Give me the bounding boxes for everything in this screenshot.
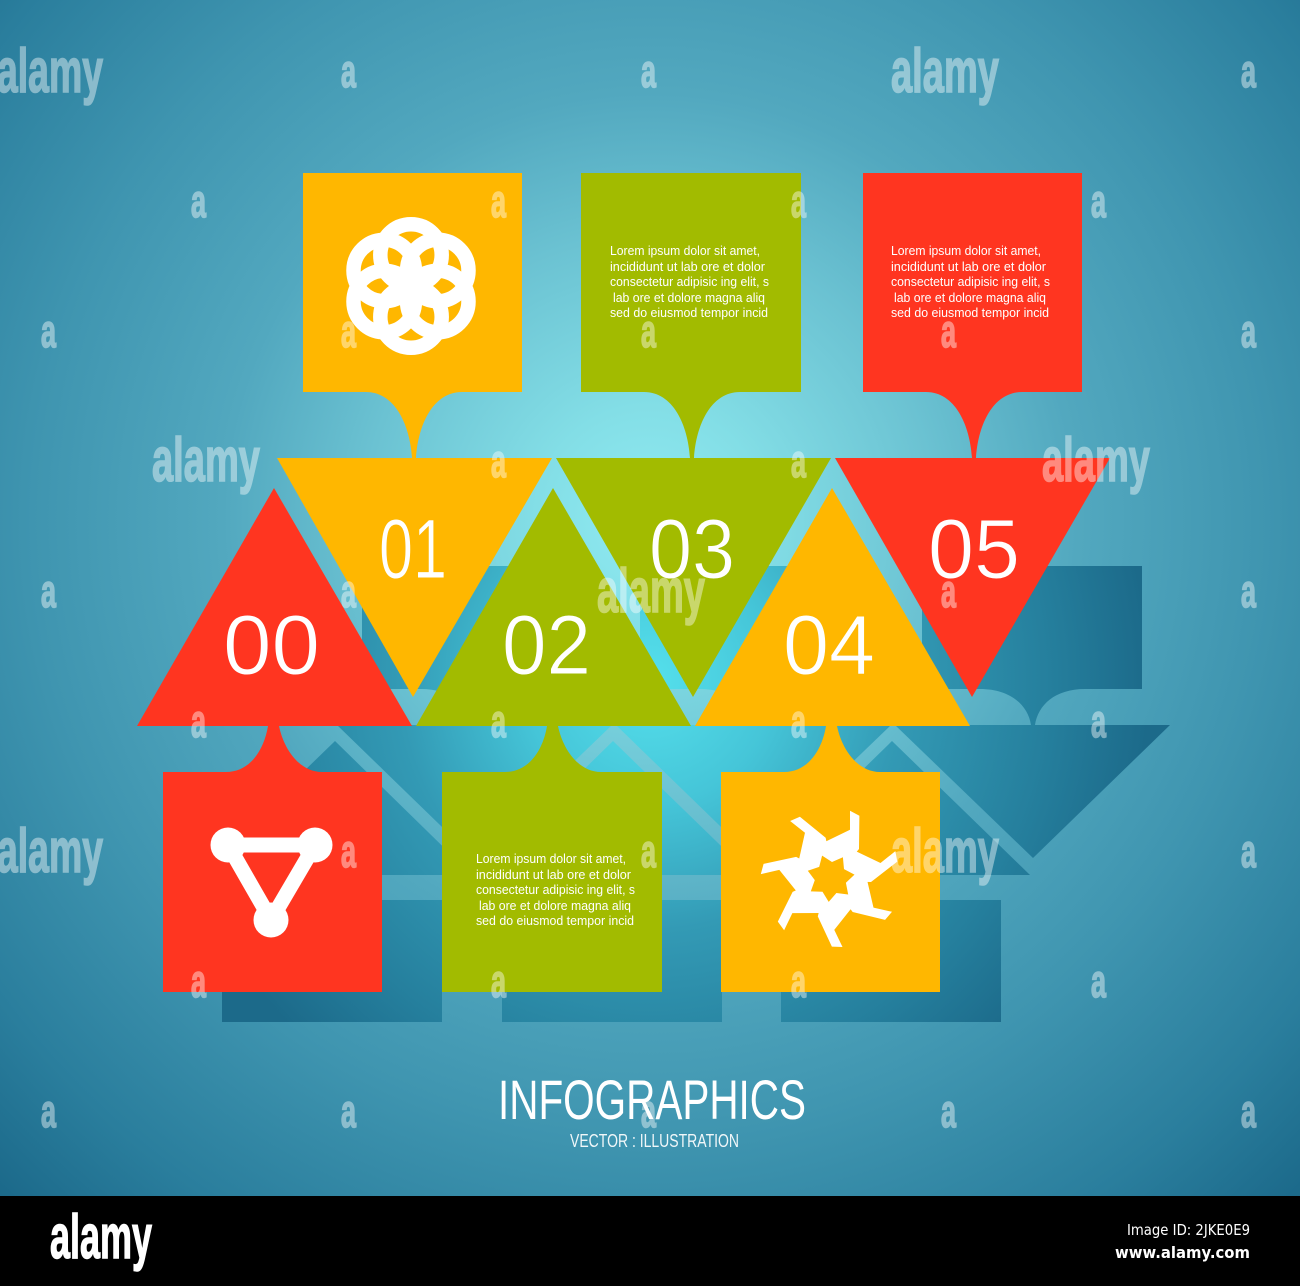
subtitle: VECTOR : ILLUSTRATION [570, 1131, 739, 1151]
watermarks: a [191, 955, 206, 1007]
text block: incididunt ut lab ore et dolor [610, 260, 765, 274]
text block [891, 244, 1050, 320]
watermarks: a [1241, 305, 1256, 357]
watermarks: a [1241, 565, 1256, 617]
footer bar [0, 1196, 1300, 1286]
text block: sed do eiusmod tempor incid [610, 306, 768, 320]
watermarks: a [1241, 45, 1256, 97]
pin: yellow top with rosette icon [303, 173, 522, 458]
pin: red top with text [863, 173, 1082, 458]
footer logo: alamy [50, 1203, 152, 1272]
watermarks: a [1091, 695, 1106, 747]
watermarks: a [941, 305, 956, 357]
text block: lab ore et dolore magna aliq [894, 291, 1046, 305]
text block: incididunt ut lab ore et dolor [476, 868, 631, 882]
watermarks: a [491, 695, 506, 747]
watermarks: a [491, 175, 506, 227]
icon: seven blade star [759, 811, 901, 951]
triangle 05: 05 [928, 502, 1020, 596]
image id: Image ID: 2JKE0E9 [1127, 1221, 1250, 1239]
triangle 00 [137, 488, 412, 726]
watermarks: a [341, 1085, 356, 1137]
watermarks: alamy [0, 37, 103, 106]
watermarks: a [191, 695, 206, 747]
text block: consectetur adipisic ing elit, s [610, 275, 769, 289]
text block: consectetur adipisic ing elit, s [476, 883, 635, 897]
watermarks: a [1241, 825, 1256, 877]
watermarks: a [41, 1085, 56, 1137]
watermarks: a [1091, 175, 1106, 227]
watermarks: a [491, 435, 506, 487]
pin: red bottom with triangle icon [163, 726, 382, 992]
triangle 02 [416, 488, 691, 726]
icon: connected triangle [210, 828, 332, 938]
website: www.alamy.com [1115, 1243, 1250, 1262]
watermarks: a [1241, 1085, 1256, 1137]
watermarks: a [791, 695, 806, 747]
watermarks: a [941, 1085, 956, 1137]
watermarks: alamy [152, 426, 260, 495]
watermarks: a [191, 175, 206, 227]
triangle 01: 01 [379, 502, 447, 596]
watermarks: alamy [891, 37, 999, 106]
watermarks: a [341, 825, 356, 877]
triangle 03 [556, 458, 831, 697]
watermarks: a [641, 825, 656, 877]
pin: green bottom with text [442, 726, 662, 992]
watermarks: alamy [597, 557, 705, 626]
pin: yellow bottom with star icon [721, 726, 940, 992]
title: INFOGRAPHICS [498, 1068, 806, 1131]
text block: lab ore et dolore magna aliq [613, 291, 765, 305]
triangle 01 [277, 458, 552, 697]
watermarks: a [41, 565, 56, 617]
text block: consectetur adipisic ing elit, s [891, 275, 1050, 289]
text block: Lorem ipsum dolor sit amet, [476, 852, 626, 866]
watermarks: a [791, 175, 806, 227]
text block: incididunt ut lab ore et dolor [891, 260, 1046, 274]
watermarks: a [641, 45, 656, 97]
text block [610, 244, 769, 320]
text block [476, 852, 635, 928]
watermarks: a [341, 45, 356, 97]
watermarks: alamy [0, 817, 103, 886]
watermarks: a [41, 305, 56, 357]
triangle 03: 03 [649, 502, 735, 596]
shadow shapes [197, 566, 1170, 1022]
watermarks: a [641, 1085, 656, 1137]
watermarks: alamy [891, 817, 999, 886]
watermarks: a [791, 435, 806, 487]
watermarks: a [791, 955, 806, 1007]
watermarks: a [341, 565, 356, 617]
triangle 05 [835, 458, 1110, 697]
triangle 04 [695, 488, 970, 726]
text block: sed do eiusmod tempor incid [891, 306, 1049, 320]
watermarks: a [1091, 955, 1106, 1007]
text block: sed do eiusmod tempor incid [476, 914, 634, 928]
triangle 00: 00 [223, 598, 320, 692]
text block: Lorem ipsum dolor sit amet, [891, 244, 1041, 258]
text block: lab ore et dolore magna aliq [479, 899, 631, 913]
watermarks: a [641, 305, 656, 357]
watermarks: a [491, 955, 506, 1007]
pin: green top with text [581, 173, 801, 458]
watermarks: a [941, 565, 956, 617]
text block: Lorem ipsum dolor sit amet, [610, 244, 760, 258]
watermarks: alamy [1042, 426, 1150, 495]
triangle 02: 02 [502, 598, 591, 692]
icon: rosette of rings [354, 224, 468, 348]
watermarks: a [341, 305, 356, 357]
triangle 04: 04 [783, 598, 875, 692]
